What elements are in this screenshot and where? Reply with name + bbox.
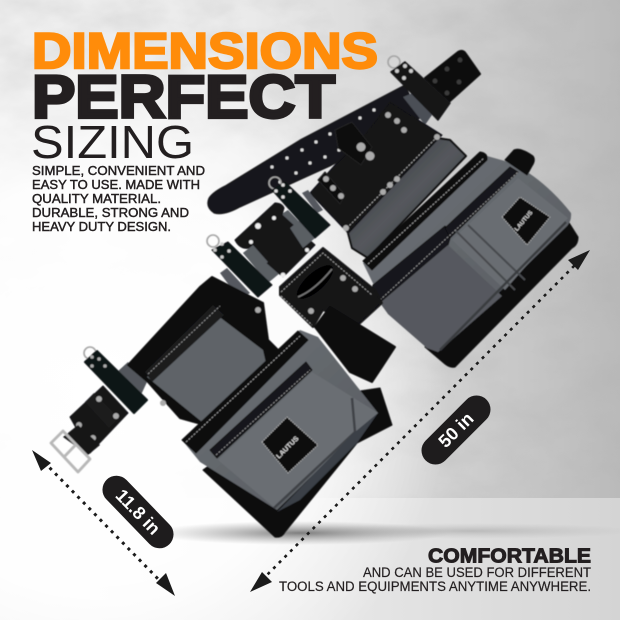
lower bag: main gray pouch	[182, 330, 378, 512]
upper bag: back panel	[425, 218, 578, 367]
pill label: 50 in	[416, 390, 496, 470]
text block: description: SIMPLE, CONVENIENT AND	[32, 164, 205, 178]
pill label: 50 in: 50 in	[434, 408, 478, 452]
arrow: length dimension 50 in	[250, 250, 590, 592]
callout: comfortable	[279, 544, 591, 594]
lower bag: upper pouch	[128, 277, 278, 425]
belt: tail and top end	[208, 51, 480, 214]
callout: comfortable: TOOLS AND EQUIPMENTS ANYTIME ANYWHERE.	[279, 579, 591, 594]
text block: description: HEAVY DUTY DESIGN.	[32, 220, 171, 234]
product: tool belt	[51, 51, 578, 537]
upper bag: glossy pocket	[348, 138, 466, 258]
heading: dimensions perfect sizing: DIMENSIONS	[32, 22, 378, 79]
upper bag: leather holster	[310, 102, 442, 233]
upper bag: main gray pouch	[363, 152, 571, 352]
lower bag: logo patch	[262, 417, 318, 473]
text block: description	[32, 164, 205, 234]
heading: dimensions perfect sizing: SIZING	[31, 116, 194, 168]
central leather plate with handle	[280, 248, 382, 327]
callout: comfortable: COMFORTABLE	[428, 544, 591, 568]
central belt: fabric and loops	[207, 177, 330, 300]
lower bag: logo patch: LAUTUS	[275, 435, 301, 460]
upper bag: logo patch	[502, 197, 550, 245]
lower bag: back panel	[203, 388, 392, 537]
upper bag: small loop	[505, 149, 534, 175]
text block: description: EASY TO USE. MADE WITH	[32, 178, 200, 192]
top strap with D ring	[388, 56, 450, 125]
callout: comfortable: AND CAN BE USED FOR DIFFERENT	[363, 565, 591, 580]
arrow: height dimension 11.8 in	[32, 450, 175, 596]
heading: dimensions perfect sizing	[31, 22, 378, 168]
upper bag: logo patch: LAUTUS	[514, 210, 534, 233]
heading: dimensions perfect sizing: PERFECT	[32, 64, 335, 130]
pill label: 11.8 in	[97, 470, 179, 554]
left belt end with buckle	[51, 347, 147, 472]
lower bag: cylinder holder	[315, 307, 395, 382]
pill label: 11.8 in: 11.8 in	[112, 485, 164, 539]
text block: description: DURABLE, STRONG AND	[32, 206, 189, 220]
text block: description: QUALITY MATERIAL.	[32, 192, 161, 206]
